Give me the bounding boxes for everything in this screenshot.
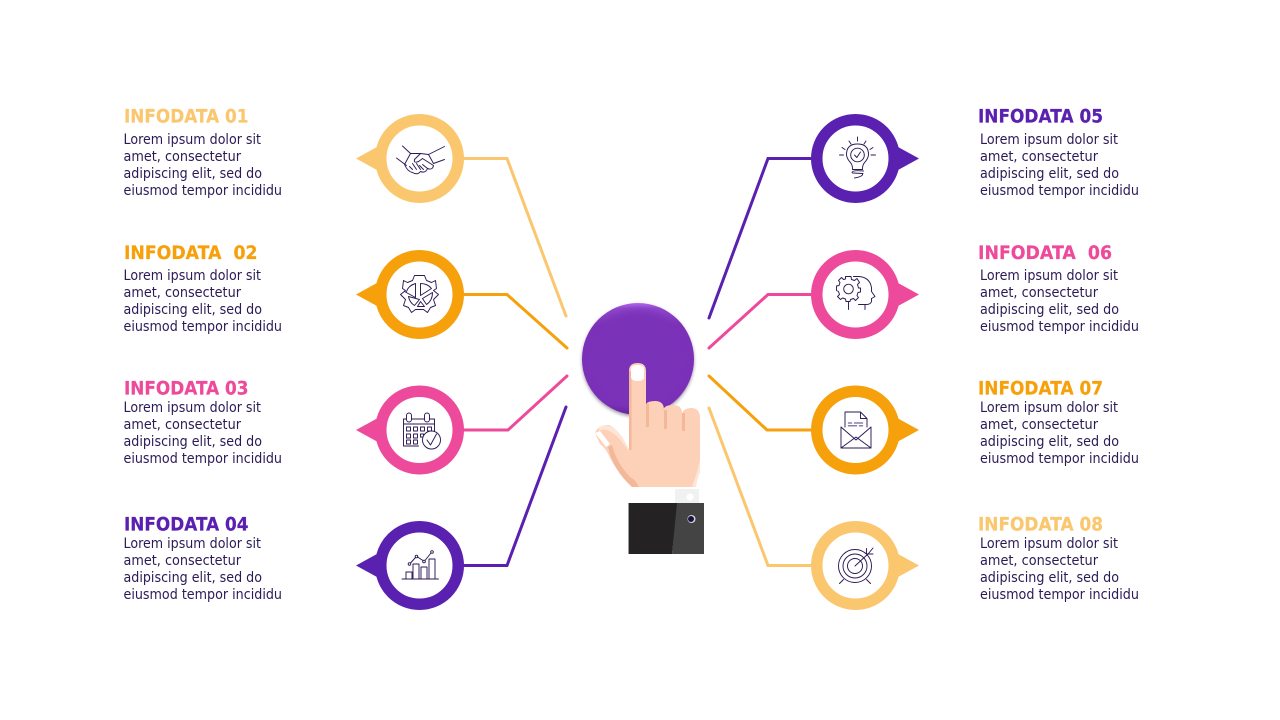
text block: infodata 01: adipiscing elit, sed do xyxy=(124,166,262,182)
text block: infodata 07: amet, consectetur xyxy=(980,417,1098,433)
text block: infodata 01: eiusmod tempor incididu xyxy=(124,183,282,199)
text block: infodata 04: Lorem ipsum dolor sit xyxy=(124,536,261,552)
text block: infodata 03: Lorem ipsum dolor sit xyxy=(124,400,261,416)
text block: infodata 06: INFODATA 06 xyxy=(978,243,1112,264)
text block: infodata 04 xyxy=(124,514,282,603)
icon: lightbulb xyxy=(840,137,876,178)
icon: growth chart xyxy=(402,551,438,579)
connector: 08 xyxy=(709,408,816,566)
text block: infodata 06: amet, consectetur xyxy=(980,285,1098,301)
text block: infodata 02: INFODATA 02 xyxy=(124,243,258,264)
text block: infodata 03: eiusmod tempor incididu xyxy=(124,451,282,467)
text block: infodata 07: adipiscing elit, sed do xyxy=(980,434,1119,450)
text block: infodata 08: Lorem ipsum dolor sit xyxy=(980,536,1118,552)
text block: infodata 06: eiusmod tempor incididu xyxy=(980,319,1139,335)
text block: infodata 07: eiusmod tempor incididu xyxy=(980,451,1139,467)
text block: infodata 05: adipiscing elit, sed do xyxy=(980,166,1119,182)
text block: infodata 04: INFODATA 04 xyxy=(124,514,248,536)
text block: infodata 08: amet, consectetur xyxy=(980,553,1098,569)
text block: infodata 02: amet, consectetur xyxy=(124,285,241,301)
text block: infodata 03 xyxy=(124,378,282,467)
text block: infodata 04: eiusmod tempor incididu xyxy=(124,587,282,603)
fingernails xyxy=(631,365,644,381)
text block: infodata 01 xyxy=(124,106,282,199)
text block: infodata 06: adipiscing elit, sed do xyxy=(980,302,1119,318)
icon: target xyxy=(838,548,873,584)
text block: infodata 07: Lorem ipsum dolor sit xyxy=(980,400,1118,416)
text block: infodata 02: adipiscing elit, sed do xyxy=(124,302,262,318)
connector: 03 xyxy=(460,376,567,430)
text block: infodata 02 xyxy=(124,243,282,335)
text block: infodata 05: Lorem ipsum dolor sit xyxy=(980,132,1118,148)
text block: infodata 01: INFODATA 01 xyxy=(124,106,248,128)
connector: 05 xyxy=(709,158,816,318)
sleeve cuff xyxy=(675,489,699,503)
jacket sleeve xyxy=(628,503,678,554)
text block: infodata 05 xyxy=(978,106,1139,199)
text block: infodata 03: amet, consectetur xyxy=(124,417,241,433)
text block: infodata 07 xyxy=(978,378,1139,467)
text block: infodata 03: INFODATA 03 xyxy=(124,378,248,400)
text block: infodata 03: adipiscing elit, sed do xyxy=(124,434,262,450)
icon: envelope with document xyxy=(841,412,871,448)
text block: infodata 04: amet, consectetur xyxy=(124,553,241,569)
badge 05: lightbulb xyxy=(817,120,919,197)
hand shading xyxy=(608,371,685,487)
text block: infodata 05: amet, consectetur xyxy=(980,149,1098,165)
text block: infodata 06: Lorem ipsum dolor sit xyxy=(980,268,1118,284)
text block: infodata 02: eiusmod tempor incididu xyxy=(124,319,282,335)
connector: 07 xyxy=(709,376,816,430)
connector: 06 xyxy=(709,294,816,348)
connector: 04 xyxy=(460,407,566,566)
text block: infodata 05: INFODATA 05 xyxy=(978,106,1103,128)
connector: 01 xyxy=(460,158,566,316)
connector: 02 xyxy=(460,294,567,348)
badge 06: head with gear xyxy=(817,256,919,333)
icon: calendar xyxy=(404,413,440,449)
text block: infodata 07: INFODATA 07 xyxy=(978,378,1103,400)
badge 01: handshake xyxy=(356,120,458,197)
text block: infodata 08: adipiscing elit, sed do xyxy=(980,570,1119,586)
text block: infodata 02: Lorem ipsum dolor sit xyxy=(124,268,261,284)
icon: head with gear xyxy=(836,276,875,310)
badge 02: gear xyxy=(356,256,458,333)
icon: gear xyxy=(400,276,438,312)
badge 03: calendar xyxy=(356,391,458,469)
icon: handshake xyxy=(396,146,444,174)
text block: infodata 05: eiusmod tempor incididu xyxy=(980,183,1139,199)
text block: infodata 08 xyxy=(978,514,1139,603)
text block: infodata 08: INFODATA 08 xyxy=(978,514,1103,536)
hand shape xyxy=(595,363,700,487)
text block: infodata 01: Lorem ipsum dolor sit xyxy=(124,132,261,148)
badge 04: chart xyxy=(356,527,458,604)
text block: infodata 08: eiusmod tempor incididu xyxy=(980,587,1139,603)
hand pressing button xyxy=(595,363,704,554)
text block: infodata 01: amet, consectetur xyxy=(124,149,241,165)
badge 07: envelope xyxy=(817,391,919,469)
text block: infodata 06 xyxy=(978,243,1139,335)
cuff button xyxy=(686,494,694,500)
text block: infodata 04: adipiscing elit, sed do xyxy=(124,570,262,586)
central button xyxy=(582,303,694,417)
badge 08: target xyxy=(817,527,919,604)
